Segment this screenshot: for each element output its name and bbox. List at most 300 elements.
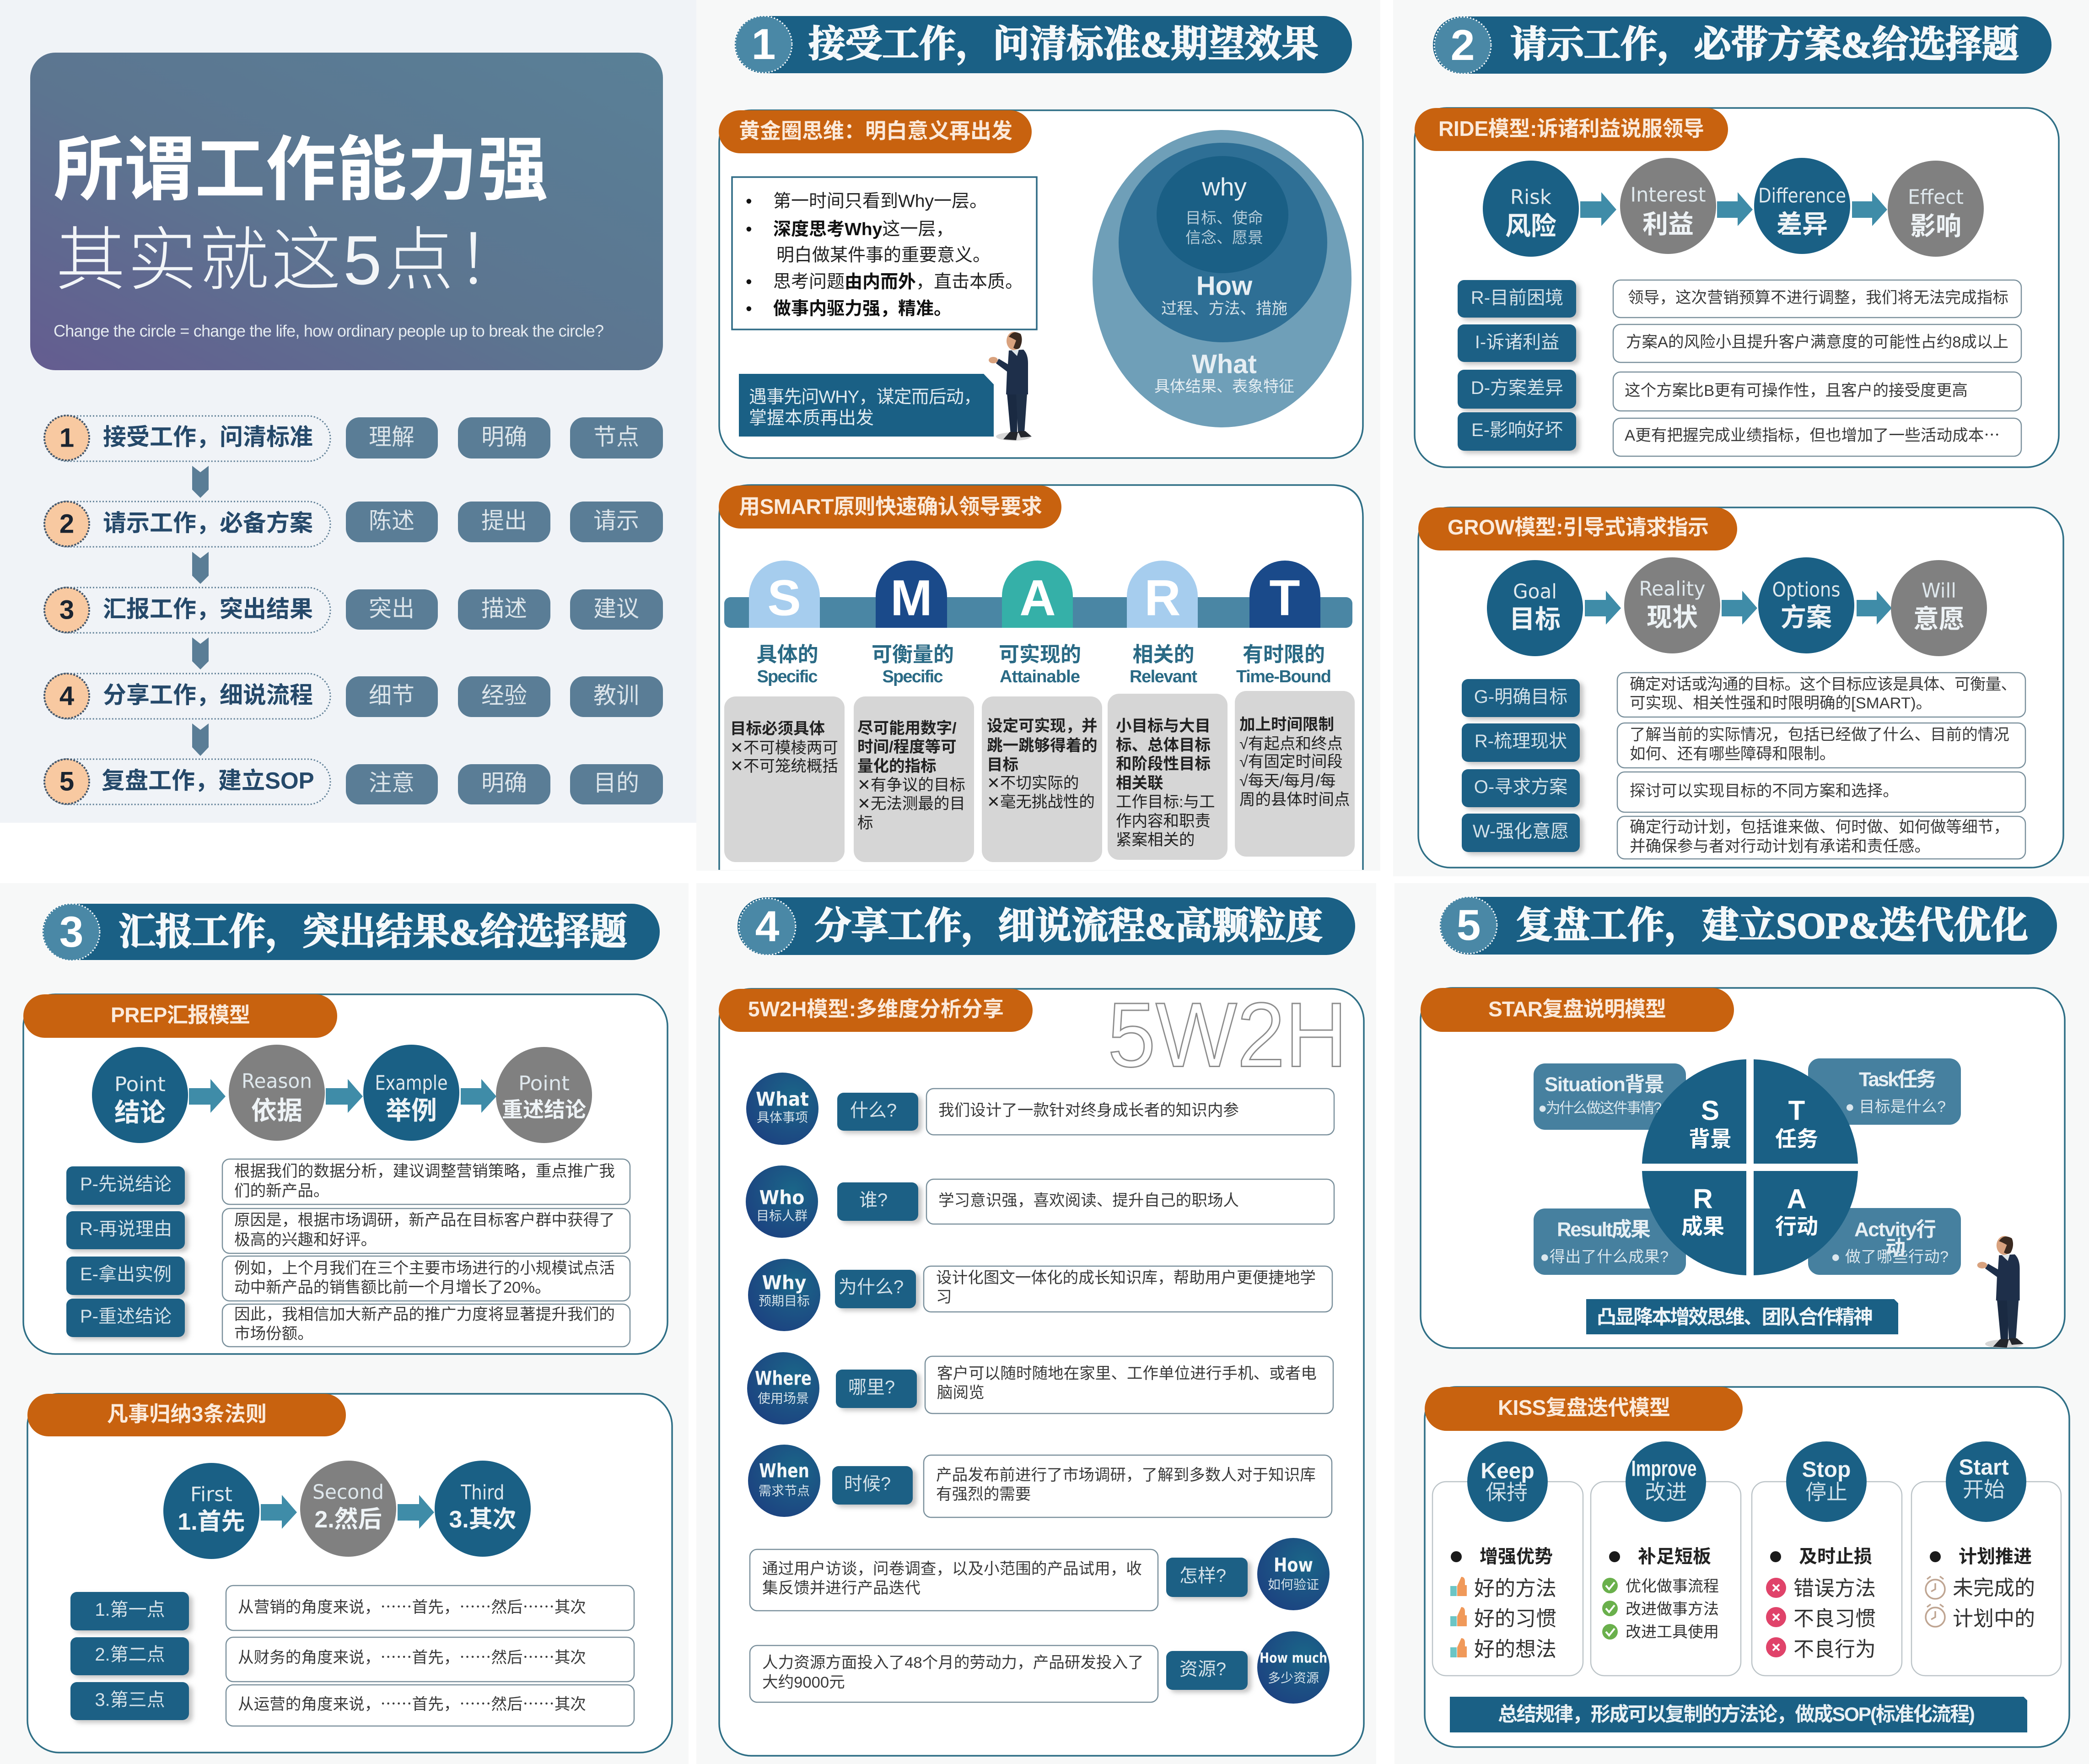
step 5 row: 目的 xyxy=(593,770,639,796)
SMART labels: 相关的 xyxy=(1132,642,1195,666)
diagram: STAR quadrants: 行动 xyxy=(1775,1214,1818,1238)
step 3 row: 3 xyxy=(59,595,74,625)
row: when xyxy=(748,1445,1332,1517)
callout bar: SOP summary xyxy=(1450,1697,2027,1732)
heading tab xyxy=(23,994,337,1038)
step 2 row xyxy=(44,502,663,547)
rows: GROW details: O-寻求方案 xyxy=(1474,777,1567,797)
diagram: golden circle: 信念、愿景 xyxy=(1185,229,1263,247)
callout bar: team spirit: 凸显降本增效思维、团队合作精神 xyxy=(1597,1306,1873,1328)
SMART labels: 可衡量的 xyxy=(872,642,954,666)
row: where: 使用场景 xyxy=(758,1391,809,1406)
heading tab: 5W2H模型:多维度分析分享 xyxy=(748,997,1004,1021)
diagram: golden circle: why xyxy=(1201,173,1247,201)
card: Relevant: 小目标与大目 xyxy=(1116,717,1211,735)
card: Relevant: 作内容和职责 xyxy=(1116,813,1211,830)
heading tab: RIDE模型:诉诸利益说服领导 xyxy=(1438,117,1704,140)
text box: golden circle points: • xyxy=(746,191,752,211)
row: what: 我们设计了一款针对终身成长者的知识内参 xyxy=(938,1102,1239,1119)
flow: RIDE circles: 影响 xyxy=(1910,211,1961,241)
card: Specific xyxy=(724,696,845,862)
rows: PREP details: 例如，上个月我们在三个主要市场进行的小规模试点活 xyxy=(234,1260,615,1277)
step 4 row: 细节 xyxy=(369,683,415,708)
header: step 1: 接受工作，问清标准&期望效果 xyxy=(808,24,1319,65)
rows: PREP details: R-再说理由 xyxy=(80,1219,172,1239)
card: Relevant: 标、总体目标 xyxy=(1116,737,1211,754)
card: Measurable: 尽可能用数字/ xyxy=(857,720,957,737)
card: Measurable: ✕无法测最的目 xyxy=(857,795,965,813)
row: who: 谁? xyxy=(859,1190,888,1210)
SMART labels xyxy=(756,642,1331,686)
rows: PREP details: 市场份额。 xyxy=(234,1325,313,1343)
step 5 row: 注意 xyxy=(369,770,415,796)
rows: three points xyxy=(70,1586,634,1726)
row: when: 需求节点 xyxy=(759,1483,810,1498)
step 3 row: 描述 xyxy=(481,596,527,621)
header: step 5 xyxy=(1440,897,2057,955)
header: step 4: 分享工作，细说流程&高颗粒度 xyxy=(814,906,1323,947)
rows: PREP details: 动中新产品的销售额比前一个月增长了20%。 xyxy=(234,1279,551,1296)
step 5 row: 复盘工作，建立SOP xyxy=(102,768,314,793)
card: Specific: ✕不可模棱两可 xyxy=(730,739,838,757)
column: improve: 补足短板 xyxy=(1638,1547,1711,1567)
card: Time-Bound xyxy=(1235,691,1355,857)
panel: PREP model xyxy=(23,994,668,1354)
row: how much: 大约9000元 xyxy=(762,1674,845,1691)
header: step 1 xyxy=(735,16,1352,73)
card: Measurable: ✕有争议的目标 xyxy=(857,777,965,794)
panel: KISS model xyxy=(1425,1387,2069,1747)
flow: PREP circles: Reason xyxy=(242,1070,312,1093)
step 4 row: 4 xyxy=(59,681,74,711)
flow: RIDE circles: 利益 xyxy=(1642,210,1694,239)
rows: PREP details: P-先说结论 xyxy=(80,1174,172,1194)
row: where: 客户可以随时随地在家里、工作单位进行手机、或者电 xyxy=(937,1365,1317,1382)
flow: GROW circles xyxy=(1487,557,1987,656)
title banner xyxy=(30,53,663,370)
column: improve: 改进工具使用 xyxy=(1626,1624,1719,1641)
column: stop: Stop xyxy=(1802,1458,1851,1482)
step 2 row: 请示工作，必备方案 xyxy=(103,510,313,536)
flow: first second third xyxy=(163,1461,531,1559)
callout: task: ● 目标是什么? xyxy=(1845,1098,1946,1116)
SMART labels: Specific xyxy=(882,667,943,686)
row: who xyxy=(746,1165,1334,1238)
callout: task: Task任务 xyxy=(1859,1068,1936,1091)
card: Time-Bound: 加上时间限制 xyxy=(1239,716,1334,734)
heading tab: KISS复盘迭代模型 xyxy=(1498,1396,1670,1419)
rows: RIDE details: I-诉诸利益 xyxy=(1475,332,1559,352)
band with SMART arches xyxy=(724,561,1352,628)
arrow 2 to 3 xyxy=(192,552,209,584)
rows: GROW details: 确定行动计划，包括谁来做、何时做、如何做等细节， xyxy=(1630,819,2009,836)
row: what: 具体事项 xyxy=(757,1110,808,1125)
card: Attainable xyxy=(982,696,1102,862)
watermark: 5W2H: 5W2H xyxy=(1108,984,1347,1086)
flow: GROW circles: Goal xyxy=(1513,580,1557,603)
row: why: 习 xyxy=(936,1289,952,1306)
text box: golden circle points: • xyxy=(746,220,752,239)
band with SMART arches: S xyxy=(767,570,801,626)
diagram: golden circle: 具体结果、表象特征 xyxy=(1154,378,1294,395)
callout: activity: 动 xyxy=(1885,1236,1906,1259)
panel: GROW model xyxy=(1418,507,2063,868)
row: how much: 人力资源方面投入了48个月的劳动力，产品研发投入了 xyxy=(762,1654,1144,1672)
flow: RIDE circles xyxy=(1483,158,1984,257)
column: start: 未完成的 xyxy=(1953,1576,2035,1600)
header: step 4: 4 xyxy=(755,902,780,951)
heading tab xyxy=(1425,1387,1743,1431)
column: start: 计划推进 xyxy=(1959,1547,2032,1567)
row: how much: 多少资源 xyxy=(1268,1671,1319,1685)
text box: golden circle points: 思考问题由内而外，直击本质。 xyxy=(773,272,1023,292)
header: step 4 xyxy=(738,897,1355,955)
diagram: STAR quadrants: S xyxy=(1701,1095,1719,1126)
header: step 1: 1 xyxy=(752,20,775,69)
row: how: How xyxy=(1274,1554,1313,1576)
arrow 3 to 4 xyxy=(192,637,209,669)
step 4 row xyxy=(44,674,663,719)
flow: RIDE circles: 风险 xyxy=(1505,211,1556,241)
flow: PREP circles: 重述结论 xyxy=(502,1098,586,1122)
rows: RIDE details: D-方案差异 xyxy=(1471,378,1563,398)
step 1 row: 接受工作，问清标准 xyxy=(103,424,313,450)
panel: 5W2H model xyxy=(719,984,1364,1756)
rows: three points: 3.第三点 xyxy=(95,1690,165,1710)
row: why: 为什么? xyxy=(839,1277,904,1297)
heading tab: PREP汇报模型 xyxy=(111,1003,250,1027)
row: why xyxy=(748,1259,1332,1331)
diagram: STAR quadrants: R xyxy=(1693,1183,1713,1214)
heading tab: 凡事归纳3条法则 xyxy=(107,1402,267,1426)
column: stop: 不良习惯 xyxy=(1793,1607,1876,1630)
card: Relevant: 工作目标:与工 xyxy=(1116,793,1215,811)
row: how xyxy=(750,1538,1330,1611)
flow: RIDE circles: Effect xyxy=(1908,186,1964,209)
rows: three points: 从营销的角度来说，⋯⋯首先，⋯⋯然后⋯⋯其次 xyxy=(238,1599,586,1616)
column: keep xyxy=(1432,1441,1583,1676)
rows: GROW details: G-明确目标 xyxy=(1474,687,1567,707)
header: step 2 xyxy=(1433,16,2051,74)
row: when: 时候? xyxy=(844,1474,891,1494)
column: improve: Improve xyxy=(1631,1457,1696,1481)
rows: PREP details: 极高的兴趣和好评。 xyxy=(234,1231,377,1249)
step 1 row xyxy=(44,415,663,461)
card: Measurable xyxy=(854,696,974,862)
card: Attainable: 跳一跳够得着的 xyxy=(987,737,1097,755)
band with SMART arches: T xyxy=(1269,570,1300,626)
band with SMART arches: R xyxy=(1144,570,1181,626)
column: stop: 不良行为 xyxy=(1793,1637,1876,1661)
callout: result xyxy=(1534,1208,1686,1275)
rows: PREP details: 原因是，根据市场调研，新产品在目标客户群中获得了 xyxy=(234,1212,615,1229)
heading tab: 用SMART原则快速确认领导要求 xyxy=(739,495,1042,518)
column: improve xyxy=(1591,1441,1741,1676)
rows: RIDE details xyxy=(1458,280,2021,456)
heading tab xyxy=(1415,108,1728,151)
step 1 row: 明确 xyxy=(481,424,527,450)
rows: RIDE details: 方案A的风险小且提升客户满意度的可能性占约8成以上 xyxy=(1626,334,2008,351)
step 1 row: 1 xyxy=(59,423,74,453)
panel: golden circle xyxy=(719,110,1363,458)
row: how much xyxy=(750,1631,1330,1704)
column: stop: 及时止损 xyxy=(1799,1547,1872,1567)
callout: result: Result成果 xyxy=(1557,1218,1651,1241)
step 4 row: 分享工作，细说流程 xyxy=(103,682,313,708)
title line 1: 所谓工作能力强 xyxy=(54,130,548,209)
column: stop: 停止 xyxy=(1805,1480,1847,1504)
row: why: 设计化图文一体化的成长知识库，帮助用户更便捷地学 xyxy=(936,1269,1316,1287)
callout: ask why first: 掌握本质再出发 xyxy=(749,408,874,428)
heading tab: 黄金圈思维：明白意义再出发 xyxy=(739,119,1012,143)
flow: GROW circles: 目标 xyxy=(1509,605,1561,633)
figure: businessman xyxy=(1977,1236,2024,1348)
card: Attainable: ✕不切实际的 xyxy=(987,775,1079,792)
panel: rule of three xyxy=(27,1394,672,1753)
column: improve: 优化做事流程 xyxy=(1626,1578,1719,1595)
diagram: golden circle xyxy=(1093,130,1351,427)
diagram: STAR quadrants xyxy=(1642,1059,1858,1275)
callout: activity xyxy=(1808,1208,1961,1275)
column: start xyxy=(1911,1441,2061,1676)
heading tab xyxy=(27,1394,346,1436)
flow: PREP circles: 结论 xyxy=(114,1098,166,1127)
text box: golden circle points: • xyxy=(746,272,752,292)
panel: RIDE model xyxy=(1415,108,2059,467)
header: step 5: 复盘工作，建立SOP&迭代优化 xyxy=(1516,905,2028,947)
flow: RIDE circles: Interest xyxy=(1631,183,1706,207)
rows: PREP details: 因此，我相信加大新产品的推广力度将显著提升我们的 xyxy=(234,1306,615,1323)
card: Attainable: 设定可实现，并 xyxy=(987,717,1097,735)
row: what: What xyxy=(756,1088,809,1110)
rows: RIDE details: 领导，这次营销预算不进行调整，我们将无法完成指标 xyxy=(1628,289,2008,307)
callout: activity: ● 做了哪些行动? xyxy=(1831,1248,1949,1266)
card: Specific: ✕不可笼统概括 xyxy=(730,758,838,775)
SMART labels: 可实现的 xyxy=(999,642,1081,666)
column: start: 计划中的 xyxy=(1953,1607,2035,1630)
column: keep: 好的方法 xyxy=(1474,1577,1556,1600)
rows: GROW details: 如何、还有哪些障碍和限制。 xyxy=(1630,745,1836,763)
rows: PREP details: 根据我们的数据分析，建议调整营销策略，重点推广我 xyxy=(234,1163,615,1180)
rows: three points: 1.第一点 xyxy=(95,1600,165,1620)
rows: three points: 从运营的角度来说，⋯⋯首先，⋯⋯然后⋯⋯其次 xyxy=(238,1696,586,1713)
SMART labels: 具体的 xyxy=(756,642,818,666)
row: who: 目标人群 xyxy=(756,1209,808,1223)
card: Time-Bound: √每天/每月/每 xyxy=(1239,772,1336,790)
row: when: 有强烈的需要 xyxy=(936,1486,1031,1503)
diagram: STAR quadrants: 成果 xyxy=(1681,1214,1724,1238)
heading tab xyxy=(1418,507,1737,550)
row: what: 什么? xyxy=(850,1100,897,1121)
card: Relevant: 相关联 xyxy=(1116,775,1163,792)
step 4 row: 教训 xyxy=(593,683,639,708)
step 5 row: 5 xyxy=(59,767,74,796)
column: improve: 改进做事方法 xyxy=(1626,1601,1719,1618)
row: how much: How much xyxy=(1260,1650,1327,1667)
callout: situation: ●为什么做这件事情? xyxy=(1538,1100,1662,1116)
flow: GROW circles: Reality xyxy=(1639,577,1706,600)
SMART labels: Attainable xyxy=(1000,667,1080,686)
diagram: golden circle: 过程、方法、措施 xyxy=(1161,300,1287,318)
step 3 row: 突出 xyxy=(369,596,415,621)
column: improve: 改进 xyxy=(1645,1480,1687,1504)
flow: GROW circles: 现状 xyxy=(1647,603,1698,631)
step 2 row: 陈述 xyxy=(369,508,415,534)
row: why: Why xyxy=(762,1271,806,1294)
row: how much: 资源? xyxy=(1179,1659,1226,1679)
card: Measurable: 时间/程度等可 xyxy=(857,739,957,756)
flow: RIDE circles: Risk xyxy=(1510,186,1552,209)
heading tab xyxy=(719,110,1032,153)
text box: golden circle points: 明白做某件事的重要意义。 xyxy=(776,245,991,265)
step 1 row: 理解 xyxy=(369,424,415,450)
rows: GROW details: R-梳理现状 xyxy=(1475,731,1567,751)
diagram: golden circle: How xyxy=(1196,271,1253,301)
rows: PREP details xyxy=(66,1159,630,1347)
column: stop xyxy=(1752,1441,1902,1676)
flow: first second third: First xyxy=(190,1483,232,1506)
heading tab: GROW模型:引导式请求指示 xyxy=(1448,515,1709,539)
flow: PREP circles: 举例 xyxy=(386,1096,437,1125)
row: who: 学习意识强，喜欢阅读、提升自己的职场人 xyxy=(938,1192,1239,1209)
row: where: 脑阅览 xyxy=(937,1384,985,1402)
diagram: STAR quadrants: A xyxy=(1787,1183,1807,1214)
header: step 2: 请示工作，必带方案&给选择题 xyxy=(1510,24,2019,66)
flow: GROW circles: 方案 xyxy=(1781,603,1832,631)
arrow 1 to 2 xyxy=(192,466,209,498)
diagram: STAR quadrants: T xyxy=(1788,1095,1805,1126)
card: Relevant: 和阶段性目标 xyxy=(1116,755,1211,773)
SMART labels: Specific xyxy=(757,667,818,686)
row: where: Where xyxy=(755,1367,812,1389)
column: keep: 好的习惯 xyxy=(1474,1607,1556,1630)
flow: PREP circles: Example xyxy=(375,1072,447,1095)
step 2 row: 提出 xyxy=(481,508,527,534)
row: how: 通过用户访谈，问卷调查，以及小范围的产品试用，收 xyxy=(762,1560,1142,1578)
diagram: STAR quadrants: 任务 xyxy=(1775,1127,1818,1151)
flow: RIDE circles: Difference xyxy=(1758,184,1846,208)
flow: GROW circles: Options xyxy=(1772,578,1840,601)
rows: RIDE details: R-目前困境 xyxy=(1471,288,1563,308)
callout: result: ●得出了什么成果? xyxy=(1540,1248,1669,1266)
rows: GROW details: 并确保参与者对行动计划有承诺和责任感。 xyxy=(1630,838,1930,855)
header: step 3: 3 xyxy=(59,908,83,956)
row: when: When xyxy=(759,1460,809,1482)
flow: GROW circles: 意愿 xyxy=(1913,605,1965,633)
SMART labels: Relevant xyxy=(1130,667,1197,686)
heading tab xyxy=(1421,988,1734,1032)
panel: SMART xyxy=(719,485,1363,870)
figure: businessman xyxy=(989,332,1032,441)
column: start: Start xyxy=(1959,1455,2009,1480)
flow: first second third: Second xyxy=(312,1481,384,1504)
step 5 row: 明确 xyxy=(481,770,527,796)
header: step 3: 汇报工作，突出结果&给选择题 xyxy=(118,912,627,953)
heading tab xyxy=(719,989,1033,1032)
text box: golden circle points: 第一时间只看到Why一层。 xyxy=(773,191,987,211)
band with SMART arches: M xyxy=(890,570,932,626)
row: where: 哪里? xyxy=(848,1377,895,1397)
flow: PREP circles: 依据 xyxy=(251,1096,302,1125)
rows: PREP details: 们的新产品。 xyxy=(234,1182,329,1200)
flow: first second third: 2.然后 xyxy=(314,1506,382,1533)
flow: PREP circles: Point xyxy=(518,1072,570,1095)
row: how: 如何验证 xyxy=(1268,1578,1319,1591)
row: what xyxy=(746,1073,1334,1145)
rows: PREP details: P-重述结论 xyxy=(80,1306,172,1327)
subtitle: Change the circle = change the life, how ordinary people up to break the circle? xyxy=(54,321,604,340)
rows: three points: 2.第二点 xyxy=(95,1645,165,1665)
arrow 4 to 5 xyxy=(192,723,209,756)
row: where xyxy=(747,1352,1333,1424)
flow: PREP circles: Point xyxy=(114,1073,166,1096)
callout: situation xyxy=(1534,1063,1686,1130)
step 5 row xyxy=(44,759,663,804)
step 3 row: 建议 xyxy=(593,596,639,621)
rows: GROW details: 确定对话或沟通的目标。这个目标应该是具体、可衡量、 xyxy=(1630,676,2017,693)
callout: ask why first: 遇事先问WHY，谋定而后动， xyxy=(749,387,981,407)
flow: RIDE circles: 差异 xyxy=(1777,210,1828,239)
rows: GROW details: 探讨可以实现目标的不同方案和选择。 xyxy=(1630,782,1899,800)
column: keep: 增强优势 xyxy=(1480,1547,1553,1567)
flow: first second third: 1.首先 xyxy=(178,1509,245,1535)
step 2 row: 请示 xyxy=(593,508,639,534)
card: Time-Bound: √有固定时间段 xyxy=(1239,753,1343,771)
column: keep: Keep xyxy=(1481,1459,1534,1483)
diagram: golden circle: What xyxy=(1192,350,1257,379)
header: step 2: 2 xyxy=(1451,21,1475,70)
row: how: 怎样? xyxy=(1179,1566,1226,1586)
card: Measurable: 标 xyxy=(857,815,873,832)
callout bar: team spirit xyxy=(1586,1299,1898,1334)
title line 2: 其实就这5点！ xyxy=(56,221,528,299)
SMART labels: 有时限的 xyxy=(1243,642,1325,666)
rows: GROW details: 可实现、相关性强和时限明确的[SMART)。 xyxy=(1630,695,1932,712)
rows: GROW details xyxy=(1462,673,2025,859)
rows: three points: 从财务的角度来说，⋯⋯首先，⋯⋯然后⋯⋯其次 xyxy=(238,1649,586,1667)
card: Attainable: 目标 xyxy=(987,756,1018,774)
row: why: 预期目标 xyxy=(759,1294,810,1308)
flow: first second third: Third xyxy=(461,1481,504,1505)
card: Relevant xyxy=(1108,694,1228,860)
rows: RIDE details: A更有把握完成业绩指标，但也增加了一些活动成本⋯ xyxy=(1625,427,2000,444)
card: Specific: 目标必须具体 xyxy=(730,720,825,738)
card: Measurable: 量化的指标 xyxy=(857,758,936,775)
callout: situation: Situation背景 xyxy=(1545,1074,1664,1095)
row: who: Who xyxy=(759,1186,804,1209)
step 3 row xyxy=(44,588,663,633)
header: step 3 xyxy=(43,904,660,960)
callout: activity: Actvity行 xyxy=(1854,1218,1936,1241)
step 1 row: 节点 xyxy=(593,424,639,450)
header: step 5: 5 xyxy=(1457,901,1481,949)
rows: RIDE details: 这个方案比B更有可操作性，且客户的接受度更高 xyxy=(1625,382,1968,399)
card: Attainable: ✕毫无挑战性的 xyxy=(987,793,1095,811)
step 2 row: 2 xyxy=(59,509,74,539)
rows: RIDE details: E-影响好坏 xyxy=(1471,420,1563,440)
callout bar: SOP summary: 总结规律，形成可以复制的方法论，做成SOP(标准化流程) xyxy=(1498,1704,1975,1726)
card: Time-Bound: 周的县体时间点 xyxy=(1239,791,1350,809)
rows: GROW details: W-强化意愿 xyxy=(1473,821,1569,842)
column: stop: 错误方法 xyxy=(1793,1577,1876,1600)
heading tab xyxy=(719,486,1061,529)
text box: golden circle points: 深度思考Why这一层， xyxy=(773,220,953,239)
diagram: golden circle: 目标、使命 xyxy=(1185,210,1263,227)
band with SMART arches: A xyxy=(1019,570,1056,626)
text box: golden circle points: • xyxy=(746,299,752,318)
flow: first second third: 3.其次 xyxy=(449,1506,517,1533)
card: Time-Bound: √有起点和终点 xyxy=(1239,735,1343,753)
